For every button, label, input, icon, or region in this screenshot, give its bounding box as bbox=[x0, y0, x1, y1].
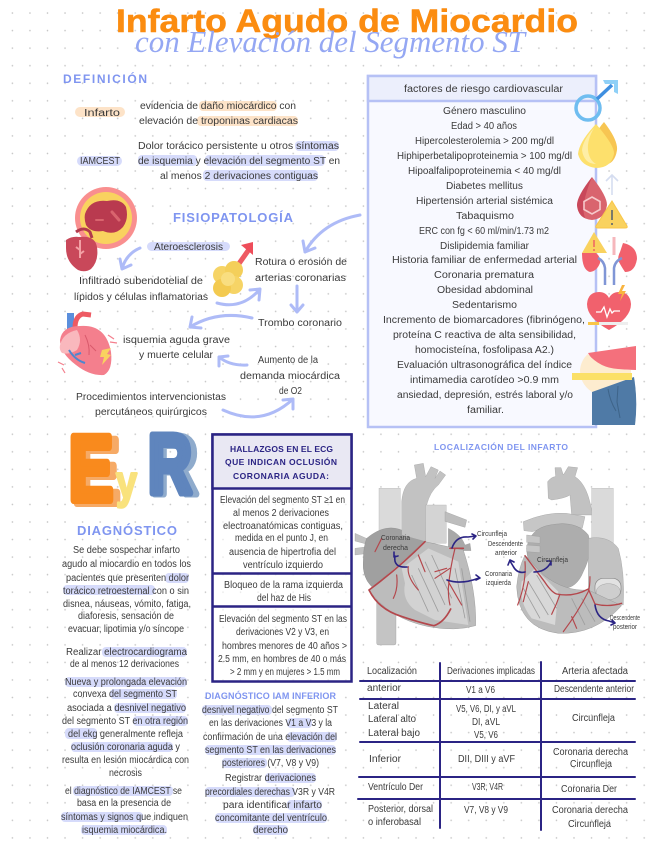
text block: diagnóstico de IAMCEST bbox=[61, 786, 188, 836]
risk factor list: ansiedad, depresión, estrés laboral y/o bbox=[397, 390, 573, 401]
diagram: posterior heart bbox=[517, 467, 624, 633]
risk factor list: intimamedia carotídeo >0.9 mm bbox=[410, 375, 559, 386]
table header row bbox=[367, 666, 628, 677]
row: anterior bbox=[367, 683, 635, 696]
callouts: anterior heart: Coronaria bbox=[381, 535, 410, 542]
definition: infarto: evidencia de daño miocárdico con bbox=[140, 101, 296, 112]
step: demanda: Aumento de la bbox=[258, 355, 318, 366]
finding: elevación ST bbox=[220, 495, 345, 571]
heading: localización: LOCALIZACIÓN DEL INFARTO bbox=[434, 441, 568, 452]
risk factor list: Hipoalfalipoproteinemia < 40 mg/dl bbox=[408, 166, 561, 177]
row: ventrículo derecho: Ventrículo Der bbox=[368, 782, 424, 793]
title: con Elevación del Segmento ST bbox=[135, 24, 528, 59]
text block: sospecha: diaforesis, sensación de bbox=[78, 611, 174, 622]
panel: diagnóstico IAM inferior bbox=[202, 690, 338, 836]
row: inferior bbox=[369, 747, 628, 770]
diagram: anterior heart bbox=[355, 463, 476, 645]
title art: E y R: R bbox=[148, 417, 192, 511]
text block: electrocardiograma: Realizar electrocardiograma bbox=[66, 647, 187, 658]
step: infiltrado: Infiltrado subendotelial de bbox=[79, 276, 203, 287]
row: lateral: V5, V6, DI, y aVL bbox=[456, 704, 516, 715]
row: inferior: Coronaria derecha bbox=[553, 747, 628, 758]
highlights and text: confirmación de una elevación del bbox=[203, 732, 337, 743]
icon: upward arrow bbox=[606, 175, 618, 195]
risk factor list: Edad > 40 años bbox=[451, 121, 517, 132]
finding: V2 y V3 bbox=[218, 614, 347, 678]
highlights and text bbox=[202, 705, 338, 836]
icon: artery and heart bbox=[66, 187, 137, 271]
finding: V2 y V3: Elevación del segmento ST en las bbox=[219, 614, 347, 625]
finding: V2 y V3: derivaciones V2 y V3, en bbox=[236, 627, 329, 638]
row: ventrículo derecho: Coronaria Der bbox=[561, 784, 618, 795]
icon: male symbol bbox=[576, 80, 618, 120]
table header row: Derivaciones implicadas bbox=[447, 666, 535, 677]
table header: CORONARIA AGUDA: bbox=[233, 471, 329, 481]
definition: infarto: Infarto bbox=[84, 108, 121, 119]
row: inferior: Inferior bbox=[369, 754, 402, 765]
title bbox=[116, 3, 578, 59]
highlights and text: para identificar infarto bbox=[223, 800, 322, 811]
step: ateroesclerosis: Ateroesclerosis bbox=[154, 242, 223, 253]
step: infiltrado bbox=[74, 276, 208, 303]
arrow: infiltrado to rotura bbox=[217, 289, 260, 305]
callouts: anterior heart bbox=[381, 531, 512, 587]
title art: E y R bbox=[69, 417, 198, 523]
step: isquemia: isquemia aguda grave bbox=[123, 335, 230, 346]
heading: diagnóstico: DIAGNÓSTICO bbox=[77, 523, 177, 538]
table: localización, derivaciones y arteria bbox=[358, 662, 635, 830]
risk factor list: Hiphiperbetalipoproteinemia > 100 mg/dl bbox=[397, 151, 572, 162]
risk factor list: Dislipidemia familiar bbox=[440, 241, 530, 252]
finding: elevación ST: ventrículo izquierdo bbox=[243, 560, 323, 571]
text block: sospecha: disnea, náuseas, vómito, fatiga, bbox=[63, 599, 191, 610]
row: anterior: anterior bbox=[367, 683, 402, 694]
row: anterior: V1 a V6 bbox=[466, 685, 495, 696]
text block: electrocardiograma: de al menos 12 derivaciones bbox=[70, 659, 179, 670]
row: posterior: Posterior, dorsal bbox=[368, 804, 433, 815]
risk factor list: Género masculino bbox=[443, 106, 526, 117]
step: procedimientos: Procedimientos intervencionistas bbox=[76, 392, 226, 403]
arrow: demanda to isquemia bbox=[219, 356, 247, 366]
row: lateral: DI, aVL bbox=[472, 717, 500, 728]
table header row: Localización bbox=[367, 666, 417, 677]
text block: diagnóstico de IAMCEST: síntomas y signos que indiquen bbox=[61, 812, 188, 823]
row: ventrículo derecho: V3R, V4R bbox=[472, 782, 503, 793]
risk factor list: Historia familiar de enfermedad arterial bbox=[392, 255, 577, 266]
row: posterior: Coronaria derecha bbox=[552, 805, 628, 816]
panel: localización del infarto bbox=[355, 441, 640, 645]
definition: infarto bbox=[75, 101, 298, 127]
row: lateral: Circunfleja bbox=[572, 713, 615, 724]
row: lateral: Lateral alto bbox=[368, 714, 416, 725]
arrow: ateroesclerosis to infiltrado bbox=[120, 248, 140, 269]
row: lateral bbox=[368, 701, 615, 741]
arrow: rotura to trombo bbox=[291, 286, 303, 312]
icon: abdomen with tape bbox=[572, 346, 636, 425]
panel: definición bbox=[63, 71, 340, 182]
risk factor list: Diabetes mellitus bbox=[446, 181, 523, 192]
risk factor list: Evaluación ultrasonográfica del índice bbox=[397, 360, 572, 371]
row: lateral: Lateral bbox=[368, 701, 399, 712]
risk factor list: proteína C reactiva de alta sensibilidad, bbox=[393, 330, 576, 341]
definition: infarto: elevación de troponinas cardiacas bbox=[139, 116, 298, 127]
text block: sospecha bbox=[62, 545, 191, 635]
text block: diagnóstico de IAMCEST: isquemia miocárdica. bbox=[82, 825, 167, 836]
highlights and text: en las derivaciones V1 a V3 y la bbox=[209, 718, 332, 729]
finding: elevación ST: al menos 2 derivaciones bbox=[233, 508, 329, 519]
icon: kidneys with warning bbox=[582, 232, 637, 285]
definition: IAMCEST bbox=[77, 141, 340, 182]
risk factor list bbox=[383, 106, 585, 416]
step: infiltrado: lípidos y células inflamatorias bbox=[74, 292, 208, 303]
text block: elevación convexa: Nueva y prolongada elevación bbox=[65, 677, 187, 688]
step: demanda bbox=[240, 355, 340, 397]
arrow: procedimientos to demanda bbox=[223, 399, 293, 417]
panel: fisiopatología bbox=[58, 210, 360, 418]
row: lateral: V5, V6 bbox=[474, 730, 498, 741]
step: rotura bbox=[255, 257, 347, 284]
finding: elevación ST: electroanatómicas contiguas, bbox=[223, 521, 343, 532]
table header: HALLAZGOS EN EL ECG bbox=[230, 444, 333, 454]
risk factor list: ERC con fg < 60 ml/min/1.73 m2 bbox=[419, 226, 549, 237]
risk factor list: Obesidad abdominal bbox=[437, 285, 533, 296]
step: rotura: Rotura o erosión de bbox=[255, 257, 347, 268]
finding: elevación ST: medida en el punto J, en bbox=[235, 533, 328, 544]
step: rotura: arterias coronarias bbox=[255, 273, 346, 284]
text block: sospecha: evacuar, lipotimia y/o síncope bbox=[68, 624, 184, 635]
row: posterior: o inferobasal bbox=[368, 817, 421, 828]
highlights and text: precordiales derechas V3R y V4R bbox=[205, 787, 335, 798]
panel header bbox=[368, 76, 596, 101]
finding: elevación ST: ausencia de hipertrofia del bbox=[229, 547, 336, 558]
risk factor list: familiar. bbox=[467, 405, 504, 416]
definition: IAMCEST: Dolor torácico persistente u otros síntomas bbox=[138, 141, 339, 152]
panel: diagnóstico bbox=[61, 523, 191, 836]
text block: sospecha: agudo al miocardio en todos los bbox=[62, 559, 191, 570]
highlights and text: segmento ST en las derivaciones bbox=[205, 745, 336, 756]
text block: diagnóstico de IAMCEST: basa en la presencia de bbox=[77, 798, 171, 809]
title art: E y R: R bbox=[150, 418, 198, 512]
text block: elevación convexa: del ekg generalmente refleja bbox=[68, 729, 183, 740]
step: trombo: Trombo coronario bbox=[258, 318, 342, 329]
callouts: posterior heart: anterior bbox=[495, 550, 518, 557]
text block: elevación convexa: convexa del segmento ST bbox=[73, 689, 177, 700]
icon: warning triangle bbox=[596, 201, 627, 228]
highlights and text: desnivel negativo del segmento ST bbox=[202, 705, 338, 716]
row: ventrículo derecho bbox=[368, 782, 618, 795]
risk factor list: Incremento de biomarcadores (fibrinógeno, bbox=[383, 315, 585, 326]
highlights and text: Registrar derivaciones bbox=[225, 773, 316, 784]
icon: heart with ECG bbox=[587, 285, 631, 330]
finding: bloqueo de rama: Bloqueo de la rama izquierda bbox=[224, 580, 343, 591]
row: inferior: DII, DIII y aVF bbox=[458, 754, 515, 765]
panel header: factores de riesgo cardiovascular bbox=[404, 84, 564, 95]
heading: fisiopatología: FISIOPATOLOGÍA bbox=[173, 210, 294, 225]
text block: elevación convexa: asociada a desnivel negativo bbox=[67, 703, 186, 714]
callouts: posterior heart: posterior bbox=[613, 624, 638, 631]
callouts: anterior heart: Coronaria bbox=[485, 571, 512, 578]
risk factor list: Tabaquismo bbox=[456, 211, 514, 222]
text block: elevación convexa bbox=[62, 677, 189, 779]
panel: hallazgos en el ECG bbox=[212, 434, 352, 682]
row: posterior bbox=[368, 804, 628, 830]
callouts: anterior heart: izquierda bbox=[486, 580, 511, 587]
finding: bloqueo de rama: del haz de His bbox=[257, 593, 311, 604]
highlights and text: derecho bbox=[253, 825, 288, 836]
step: procedimientos: percutáneos quirúrgicos bbox=[95, 407, 207, 418]
definition: IAMCEST: de isquemia y elevación del segmento ST en bbox=[138, 156, 340, 167]
text block: elevación convexa: del segmento ST en otra región bbox=[62, 716, 188, 727]
finding: elevación ST: Elevación del segmento ST ≥1 en bbox=[220, 495, 345, 506]
text block: electrocardiograma bbox=[66, 647, 187, 670]
highlights and text: concomitante del ventrículo bbox=[215, 813, 327, 824]
risk factor list: Sedentarismo bbox=[452, 300, 517, 311]
title art: E y R: E bbox=[69, 418, 113, 520]
finding: bloqueo de rama bbox=[212, 574, 352, 606]
text block: elevación convexa: necrosis bbox=[109, 768, 142, 779]
title art: E y R: E bbox=[72, 421, 120, 523]
callouts: posterior heart: Descendente bbox=[488, 541, 523, 548]
finding: V2 y V3: 2.5 mm, en hombres de 40 o más bbox=[218, 654, 346, 665]
title: Infarto Agudo de Miocardio bbox=[116, 3, 578, 39]
row: posterior: V7, V8 y V9 bbox=[464, 805, 508, 816]
text block: diagnóstico de IAMCEST: el diagnóstico de IAMCEST se bbox=[65, 786, 182, 797]
table header bbox=[212, 434, 352, 488]
step: demanda: de O2 bbox=[279, 386, 302, 397]
step: isquemia bbox=[123, 335, 230, 361]
callouts: anterior heart: derecha bbox=[383, 545, 408, 552]
icon: yellow drops bbox=[578, 122, 617, 168]
row: posterior: Circunfleja bbox=[568, 819, 611, 830]
title art: E y R: y bbox=[116, 456, 137, 508]
heading: diagnóstico IAM inferior: DIAGNÓSTICO IAM INFERIOR bbox=[205, 690, 336, 701]
icon: fat plaque with arrow bbox=[213, 242, 253, 297]
panel: factores de riesgo bbox=[368, 76, 596, 427]
row: anterior: Descendente anterior bbox=[554, 684, 635, 695]
table header: QUE INDICAN OCLUSIÓN bbox=[225, 456, 337, 467]
text block: sospecha: torácico retroesternal con o sin bbox=[63, 586, 189, 597]
text block: sospecha: pacientes que presenten dolor bbox=[66, 573, 190, 584]
risk factor list: Hipercolesterolemia > 200 mg/dl bbox=[415, 136, 554, 147]
icon: blood drop with benzene ring bbox=[577, 177, 607, 220]
definition: IAMCEST: al menos 2 derivaciones contiguas bbox=[160, 171, 318, 182]
text block: sospecha: Se debe sospechar infarto bbox=[73, 545, 180, 556]
risk factor list: Hipertensión arterial sistémica bbox=[416, 196, 553, 207]
callouts: anterior heart: Circunfleja bbox=[477, 531, 507, 538]
step: procedimientos bbox=[76, 392, 226, 418]
table header row: Arteria afectada bbox=[562, 666, 628, 677]
heading: definición: DEFINICIÓN bbox=[63, 71, 147, 86]
finding: V2 y V3: > 2 mm y en mujeres > 1.5 mm bbox=[230, 667, 340, 678]
row: inferior: Circunfleja bbox=[570, 759, 612, 770]
row: lateral: Lateral bajo bbox=[368, 728, 420, 739]
step: isquemia: y muerte celular bbox=[139, 350, 214, 361]
arrow: trombo to isquemia bbox=[190, 315, 252, 328]
finding: V2 y V3: hombres menores de 40 años > bbox=[222, 641, 347, 652]
definition: IAMCEST: IAMCEST bbox=[80, 156, 120, 167]
text block: elevación convexa: resulta en lesión miocárdica con bbox=[62, 755, 189, 766]
highlights and text: posteriores (V7, V8 y V9) bbox=[222, 758, 319, 769]
risk factor list: homocisteína, fosfolipasa A2.) bbox=[415, 345, 554, 356]
icon: damaged heart bbox=[58, 313, 117, 375]
step: demanda: demanda miocárdica bbox=[240, 371, 340, 382]
text block: elevación convexa: oclusión coronaria aguda y bbox=[71, 742, 180, 753]
risk factor list: Coronaria prematura bbox=[434, 270, 534, 281]
callouts: posterior heart bbox=[488, 541, 640, 631]
arrow: risk factors to rotura bbox=[303, 215, 360, 252]
callouts: posterior heart: Circunfleja bbox=[537, 557, 568, 564]
callouts: posterior heart: Descendente bbox=[610, 615, 640, 622]
